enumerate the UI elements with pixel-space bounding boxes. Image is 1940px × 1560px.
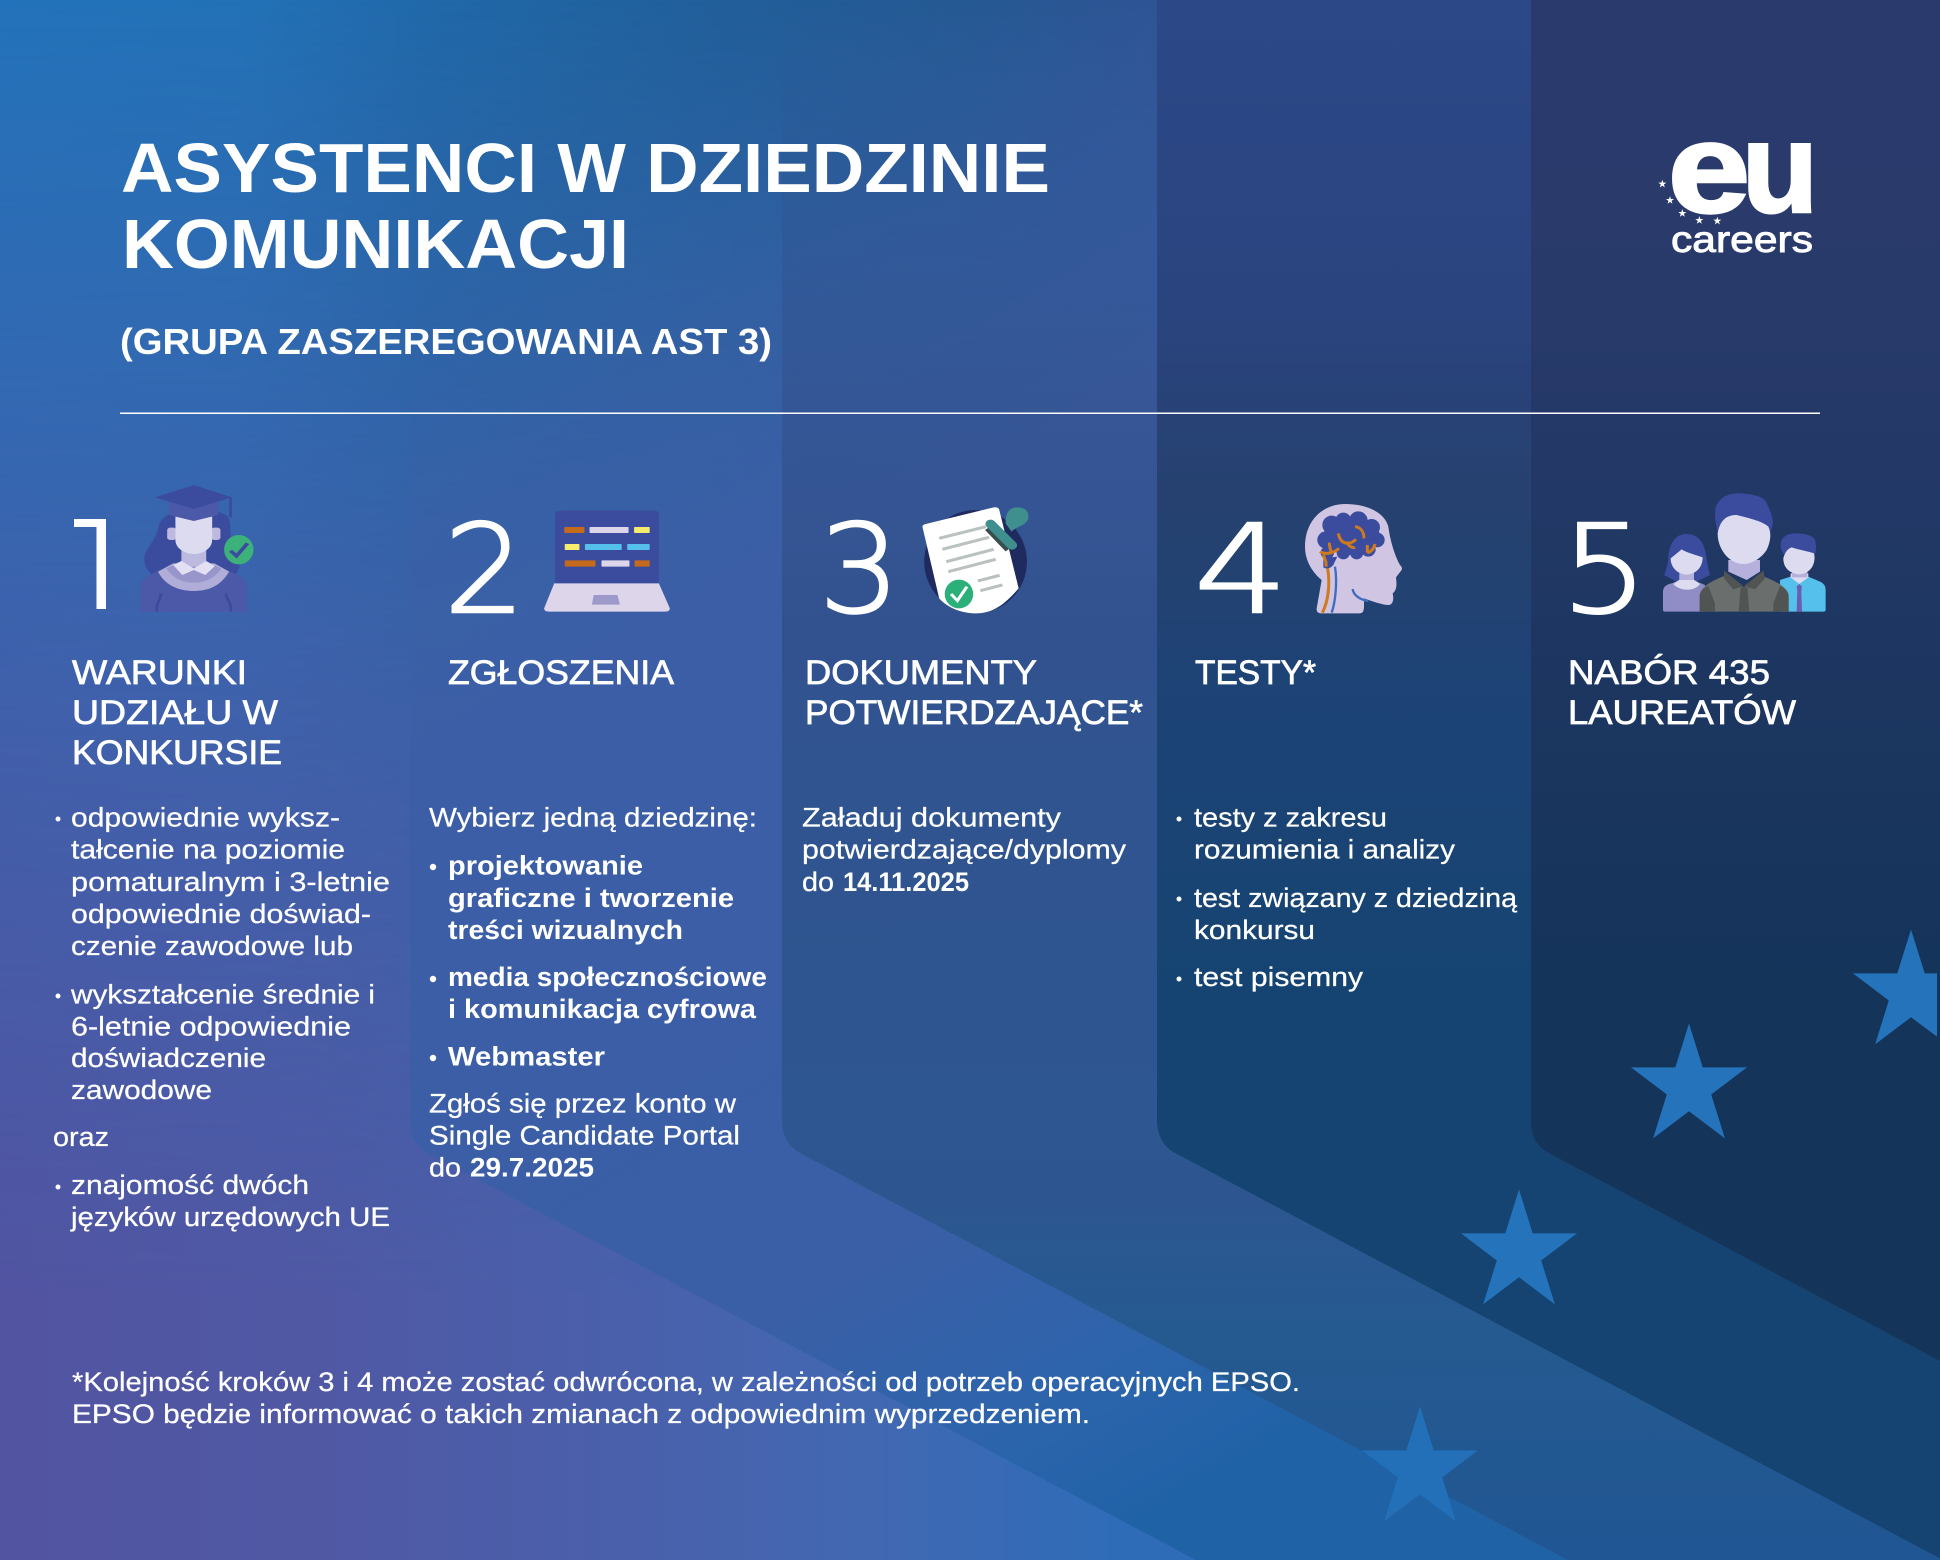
heading: UDZIAŁU W: [72, 694, 278, 732]
list: media społecznościowe: [448, 962, 767, 992]
icon: laptop: [544, 511, 670, 612]
list: Single Candidate Portal: [429, 1120, 740, 1150]
list: odpowiednie wyksz-: [71, 802, 340, 832]
number 2: 2: [444, 499, 525, 641]
text block: 14.11.2025: [843, 867, 969, 897]
heading: WARUNKI: [72, 654, 247, 692]
list: doświadczenie: [71, 1043, 266, 1073]
heading: NABÓR 435: [1568, 654, 1770, 692]
list: pomaturalnym i 3-letnie: [71, 867, 390, 897]
panel: step 3: [802, 499, 1143, 897]
list: do: [429, 1153, 461, 1183]
list: tałcenie na poziomie: [71, 835, 345, 865]
list: [53, 802, 390, 1232]
icon: head with brain: [1305, 504, 1402, 613]
panel: step 4: [1176, 499, 1518, 992]
heading: POTWIERDZAJĄCE*: [805, 694, 1143, 732]
panel: step 2: [429, 499, 767, 1183]
logo: EU careers: u: [1742, 97, 1818, 239]
list: testy z zakresu: [1194, 802, 1387, 832]
panel: step 5: [1561, 493, 1826, 732]
list: 6-letnie odpowiednie: [71, 1012, 351, 1042]
text block: Załaduj dokumenty: [802, 802, 1062, 832]
list: języków urzędowych UE: [70, 1202, 390, 1232]
list: test związany z dziedziną: [1194, 883, 1518, 913]
list: konkursu: [1194, 915, 1315, 945]
text block: potwierdzające/dyplomy: [802, 835, 1127, 865]
title: KOMUNIKACJI: [122, 205, 629, 283]
footnote: [72, 1367, 1300, 1429]
decorative EU stars: [1362, 930, 1937, 1521]
list: [429, 802, 767, 1183]
number 3: 3: [819, 499, 900, 641]
list: rozumienia i analizy: [1194, 835, 1456, 865]
list: zawodowe: [71, 1075, 212, 1105]
subtitle: (GRUPA ZASZEREGOWANIA AST 3): [120, 321, 772, 362]
footnote: *Kolejność kroków 3 i 4 może zostać odwrócona, w zależności od potrzeb operacyjnych EPSO.: [72, 1367, 1300, 1397]
list: odpowiednie doświad-: [71, 899, 371, 929]
heading: [1568, 654, 1796, 732]
icon: graduate: [140, 485, 253, 612]
list: graficzne i tworzenie: [448, 883, 734, 913]
heading: [72, 654, 282, 772]
list: Wybierz jedną dziedzinę:: [429, 802, 757, 832]
text block: [802, 802, 1127, 897]
heading: ZGŁOSZENIA: [448, 654, 674, 692]
title: [121, 129, 1050, 283]
footnote: EPSO będzie informować o takich zmianach z odpowiednim wyprzedzeniem.: [72, 1399, 1090, 1429]
list: i komunikacja cyfrowa: [448, 994, 757, 1024]
list: wykształcenie średnie i: [70, 979, 375, 1009]
heading: KONKURSIE: [72, 734, 282, 772]
list: znajomość dwóch: [71, 1170, 309, 1200]
number 1: [74, 519, 106, 609]
number 4: 4: [1194, 499, 1288, 641]
heading: TESTY*: [1195, 654, 1316, 692]
list: [1176, 802, 1518, 992]
list: oraz: [53, 1122, 109, 1152]
heading: DOKUMENTY: [805, 654, 1037, 692]
number 1: 1: [64, 496, 142, 638]
logo: EU careers: careers: [1671, 219, 1813, 260]
panel: step 1: [53, 485, 390, 1232]
logo: EU careers: [1658, 97, 1818, 260]
logo: EU careers: e: [1668, 97, 1750, 239]
list: 29.7.2025: [470, 1153, 594, 1183]
list: treści wizualnych: [448, 915, 683, 945]
heading: [805, 654, 1143, 732]
icon: group of people: [1663, 493, 1826, 612]
number 5: 5: [1561, 499, 1648, 641]
list: projektowanie: [448, 851, 643, 881]
list: czenie zawodowe lub: [71, 931, 353, 961]
list: test pisemny: [1194, 962, 1364, 992]
icon: document with stamp: [922, 507, 1028, 613]
heading: LAUREATÓW: [1568, 694, 1796, 732]
list: Webmaster: [448, 1041, 606, 1071]
text block: do: [802, 867, 834, 897]
list: Zgłoś się przez konto w: [429, 1088, 737, 1118]
title: ASYSTENCI W DZIEDZINIE: [121, 129, 1050, 207]
